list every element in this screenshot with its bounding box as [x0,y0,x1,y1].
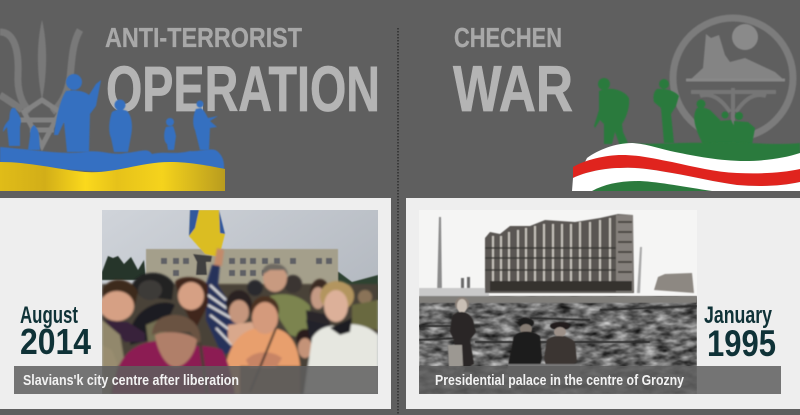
date: January: January [704,302,772,329]
heading line: Anti-terrorist: ANTI-TERRORIST [105,22,302,53]
red flag stripe [573,155,800,186]
panel: August 2014 [0,198,391,409]
photo: Presidential palace in Grozny [419,210,697,394]
woman left [102,280,138,305]
panel background [0,198,391,409]
raised arm woman [205,264,235,355]
panel background [406,198,800,409]
heading: Chechen war [453,22,573,125]
caption bar [14,366,378,394]
yellow flag band [0,162,225,191]
blue soldier silhouettes [3,74,218,152]
heading: Anti-terrorist operation [105,22,380,125]
white flag stripe top [582,143,800,175]
background crowd [102,284,378,394]
beige sleeve [102,364,118,394]
illustration: Ukrainian flag with soldiers [0,74,225,191]
green flag bottom band [592,181,712,191]
elderly woman [224,290,252,314]
black cap figure [132,273,174,300]
panel: January 1995 [406,198,800,409]
heading line: Chechen: CHECHEN [454,22,562,53]
illustration: Chechen flag with soldiers [572,78,800,191]
date: August: August [20,302,78,329]
caption bar [419,366,781,394]
center divider [397,28,399,415]
blue flag band [0,147,224,172]
dark coat background right [306,320,312,337]
orange top woman [225,327,300,394]
blonde woman in white [320,281,354,311]
rubble ground [419,296,697,394]
heading line: Operation: OPERATION [106,53,380,125]
heading line: War: WAR [453,52,573,125]
seated figures [454,298,469,310]
date: 1995: 1995 [707,323,776,364]
child [295,328,311,344]
photo: Slaviansk city centre [100,210,378,394]
caption text: Presidential palace in the centre of Grozny [435,372,685,389]
icon: Chechen emblem [673,18,793,138]
date: 2014: 2014 [20,321,91,362]
caption text: Slavians'k city centre after liberation [23,372,239,389]
green flag top band [630,143,800,165]
kneeling woman in magenta [112,341,235,394]
icon: Ukrainian trident emblem [0,20,80,146]
green soldier silhouettes [594,78,755,146]
white flag stripe bottom [572,168,800,191]
